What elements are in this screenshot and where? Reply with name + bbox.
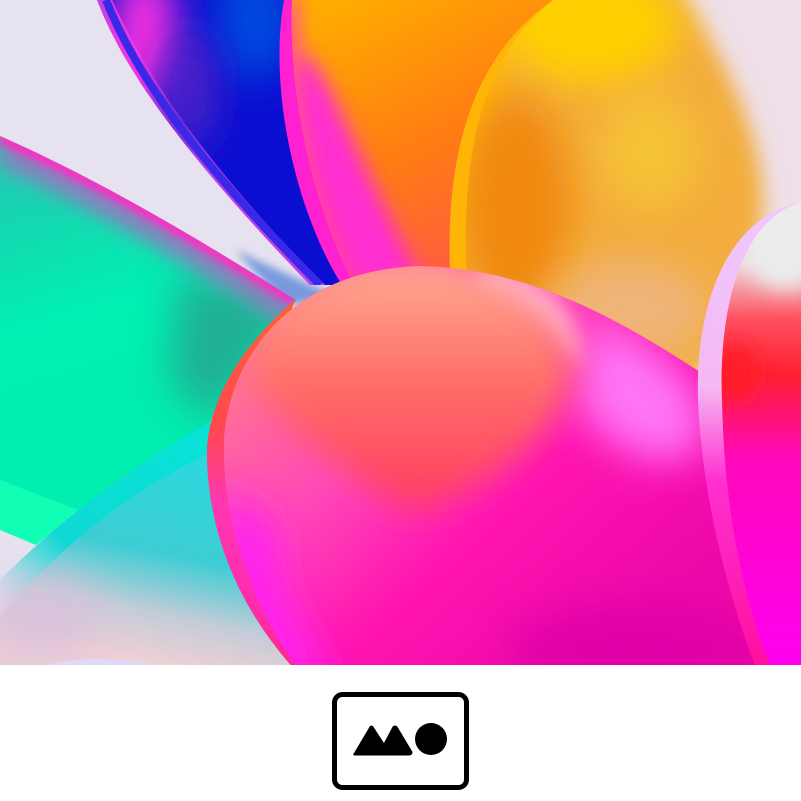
background <box>0 0 698 580</box>
pink blob rim <box>206 300 295 665</box>
pink blob <box>224 266 755 665</box>
icon: image placeholder <box>334 694 466 788</box>
icon: mountains <box>354 726 412 755</box>
yellow petal <box>450 0 763 385</box>
right petal rim <box>698 203 801 665</box>
right petal <box>722 203 801 665</box>
blue petal <box>97 0 345 285</box>
pale blue shadow near petal centre <box>235 250 345 305</box>
icon: sun <box>415 723 447 755</box>
orange petal <box>279 0 570 290</box>
lower green tip <box>0 480 78 545</box>
teal petal rim <box>0 421 212 601</box>
green petal <box>0 130 300 520</box>
pale pink top right background <box>702 0 801 210</box>
teal petal <box>0 454 290 665</box>
